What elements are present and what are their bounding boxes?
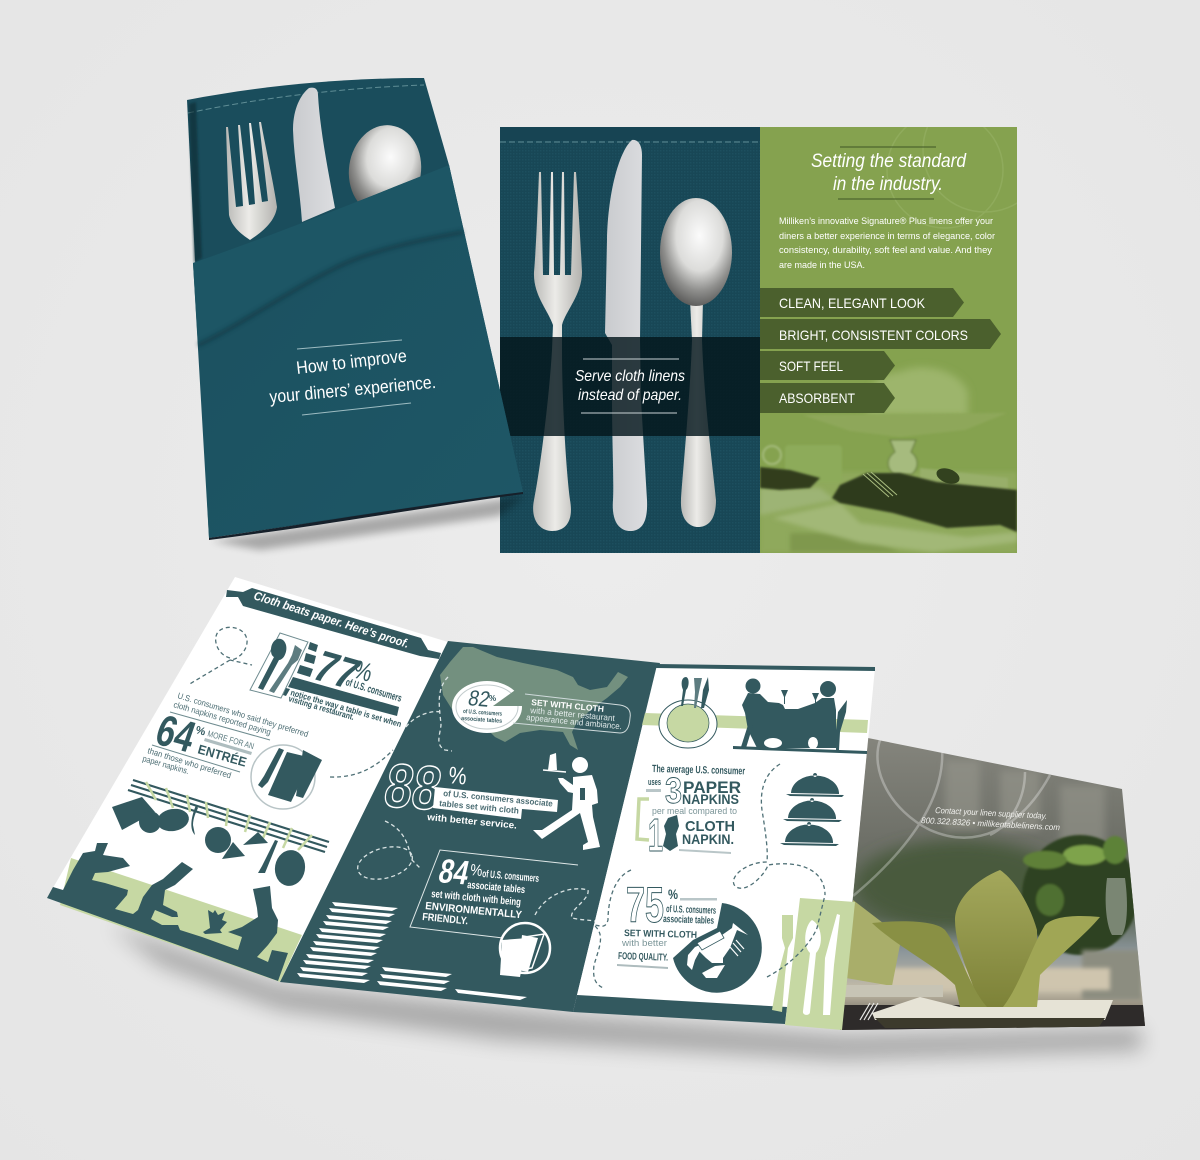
waiter head bbox=[572, 757, 588, 773]
triangle pan 2 bbox=[243, 832, 268, 845]
panel: serve cloth linens bbox=[500, 127, 760, 553]
green background bbox=[760, 127, 1017, 553]
more for an: MORE FOR AN bbox=[206, 728, 255, 751]
icon: cover knife bbox=[293, 88, 335, 222]
square pan bbox=[112, 797, 155, 830]
floor line bbox=[733, 746, 867, 754]
pill callout bbox=[513, 694, 630, 733]
cloche 2 bbox=[783, 798, 842, 822]
heading line 2: in the industry. bbox=[833, 174, 943, 195]
green fork bbox=[772, 915, 793, 1012]
88 outline figure: 88 bbox=[380, 752, 446, 824]
table and diners bbox=[742, 693, 836, 748]
open brochure shadow bbox=[110, 925, 1142, 1060]
rack rails bbox=[128, 780, 329, 852]
pale green floor strip bbox=[60, 858, 302, 982]
associate tables: associate tables bbox=[663, 914, 715, 927]
pocket flap bbox=[193, 165, 523, 538]
contact line 1: Contact your linen supplier today. bbox=[935, 805, 1047, 821]
right napkin petal bbox=[1003, 916, 1100, 1007]
pie caption bbox=[461, 709, 503, 725]
small tick bbox=[283, 688, 290, 696]
rack hooks bbox=[146, 782, 312, 850]
center napkin petal bbox=[955, 870, 1037, 1007]
dashed left path bbox=[594, 870, 631, 988]
waiter bottle bbox=[548, 753, 557, 770]
icon: large spoon bbox=[660, 198, 732, 527]
dashed over column bbox=[767, 895, 825, 977]
cover shadow bbox=[212, 496, 524, 550]
dashed path bbox=[733, 764, 825, 895]
dark tree band bbox=[855, 840, 1065, 930]
right glass bbox=[812, 693, 819, 706]
band rule bottom bbox=[581, 412, 677, 414]
body line 2: diners a better experience in terms of elegance, color bbox=[779, 231, 995, 242]
panel heading bbox=[811, 151, 967, 195]
body line 1: Milliken’s innovative Signature® Plus linens offer your bbox=[779, 216, 993, 227]
pale green strip bbox=[642, 713, 868, 733]
cover shadow side bbox=[189, 102, 202, 263]
cup bbox=[786, 446, 841, 470]
dashed map line bbox=[439, 677, 452, 751]
lobster lower claw bbox=[702, 965, 725, 978]
cupcakes bbox=[867, 367, 968, 416]
band rule top bbox=[583, 358, 679, 360]
cover heading bbox=[269, 346, 437, 407]
big 1: 1 bbox=[648, 809, 663, 861]
banner text bbox=[439, 788, 554, 816]
pale green column bbox=[785, 898, 855, 1030]
overlay ring 2 bbox=[853, 748, 942, 896]
faded photo bbox=[760, 127, 1017, 553]
waiter menu bbox=[580, 788, 585, 800]
cutlery on column bbox=[772, 914, 840, 1015]
big 77: 77 bbox=[306, 643, 368, 699]
dashed tail bbox=[385, 821, 420, 868]
cover back sheet bbox=[187, 78, 523, 538]
84 line 4: ENVIRONMENTALLY bbox=[425, 900, 522, 921]
plate stack center bbox=[377, 967, 452, 991]
panel: infographic left, white bbox=[47, 577, 448, 982]
ladle handle bbox=[191, 805, 198, 835]
top rule bbox=[656, 664, 875, 671]
rule bbox=[170, 712, 270, 740]
chefs silhouette bbox=[47, 843, 288, 981]
whisk bbox=[258, 840, 278, 873]
fork icon bbox=[269, 645, 302, 693]
84 stat bbox=[410, 850, 578, 977]
percent: % bbox=[668, 886, 678, 902]
napkin front sheet bbox=[500, 938, 528, 977]
icon: large fork bbox=[533, 172, 582, 531]
flower vase bbox=[1082, 950, 1142, 1000]
diner right head bbox=[820, 681, 836, 697]
pale table bbox=[880, 968, 1110, 990]
white page bbox=[577, 665, 875, 1010]
percent: % bbox=[470, 862, 483, 880]
overlay ring bbox=[877, 740, 1050, 838]
dark bar bbox=[288, 677, 399, 716]
cake stand stem bbox=[888, 440, 917, 474]
pie caption line 2: associate tables bbox=[461, 716, 503, 725]
pie caption line 1: of U.S. consumers bbox=[463, 709, 503, 718]
condensed text bbox=[422, 868, 540, 927]
dashed ring bbox=[354, 841, 416, 885]
knife icon bbox=[258, 748, 284, 788]
folded brochure cover bbox=[187, 78, 524, 550]
white knife bbox=[823, 914, 840, 1015]
arrow label: CLEAN, ELEGANT LOOK bbox=[779, 295, 926, 311]
foliage bbox=[1022, 835, 1138, 955]
outro copy bbox=[141, 745, 233, 780]
flap top band bbox=[193, 165, 463, 345]
cloches bbox=[780, 773, 844, 846]
percent: % bbox=[194, 724, 207, 738]
84 line 5: FRIENDLY. bbox=[422, 911, 469, 927]
intro line 2: cloth napkins reported paying bbox=[172, 699, 272, 737]
entree: ENTRÉE bbox=[196, 741, 249, 770]
plate rim bbox=[659, 700, 717, 748]
arrow: bright consistent colors bbox=[760, 319, 1001, 349]
heading line 1: How to improve bbox=[295, 346, 408, 378]
caption line 2: visiting a restaurant. bbox=[287, 693, 356, 722]
body copy bbox=[779, 216, 995, 271]
dashed paths bbox=[354, 677, 595, 921]
heading rule top bbox=[840, 146, 936, 148]
single plate bbox=[455, 989, 527, 1000]
heading line 2: your diners’ experience. bbox=[269, 372, 437, 407]
arrow label: BRIGHT, CONSISTENT COLORS bbox=[779, 327, 968, 343]
icon: large knife bbox=[605, 140, 647, 531]
with better: with better bbox=[621, 938, 667, 949]
heading line 1: Setting the standard bbox=[811, 151, 967, 172]
chefs and counter bbox=[47, 843, 288, 981]
uses: uses bbox=[648, 777, 661, 787]
top shade bbox=[500, 127, 760, 141]
per meal: per meal compared to bbox=[652, 806, 737, 816]
napkins: NAPKINS bbox=[682, 792, 739, 807]
band line 1: Serve cloth linens bbox=[575, 368, 685, 385]
dashed loop bbox=[406, 712, 441, 727]
napkin icon bbox=[268, 752, 312, 802]
food quality: FOOD QUALITY. bbox=[618, 951, 668, 964]
couple dining silhouette bbox=[733, 678, 867, 754]
left chair leg bbox=[741, 725, 753, 748]
box frame bbox=[410, 850, 578, 938]
pie disc bbox=[452, 681, 522, 733]
spoon handle bbox=[681, 300, 716, 527]
body line 3: consistency, durability, soft feel and value. And they bbox=[779, 245, 992, 256]
plate underside bbox=[875, 1018, 1105, 1028]
spoon bowl bbox=[660, 198, 732, 306]
arrow shape bbox=[760, 319, 1001, 349]
64 stat bbox=[141, 690, 322, 809]
diner left head bbox=[746, 678, 760, 694]
arrow: clean elegant look bbox=[760, 288, 964, 317]
84 line 1: of U.S. consumers bbox=[482, 868, 540, 885]
77 stat bbox=[250, 633, 403, 729]
arrow shape bbox=[760, 351, 895, 380]
left glass bbox=[781, 690, 788, 704]
white gap ovals bbox=[764, 737, 818, 749]
contact line 2: 800.322.8326 • millikentablelinens.com bbox=[921, 815, 1060, 832]
arrow label: ABSORBENT bbox=[779, 390, 855, 406]
lobster disc bbox=[673, 903, 762, 993]
pie wedge bbox=[493, 688, 526, 706]
triangle pan bbox=[222, 842, 245, 859]
body line 4: are made in the USA. bbox=[779, 260, 865, 271]
cover rule bottom bbox=[302, 403, 411, 415]
foliage mid leaves bbox=[1023, 851, 1067, 869]
intro copy bbox=[172, 690, 310, 739]
arrow shape bbox=[760, 383, 895, 413]
75 outline figure: 75 bbox=[626, 877, 664, 933]
of us consumers: of U.S. consumers bbox=[344, 676, 403, 705]
lobster body bbox=[695, 923, 748, 963]
intro line 1: U.S. consumers who said they preferred bbox=[176, 690, 310, 739]
panel: back cover photo bbox=[835, 735, 1150, 1035]
stitched hem bbox=[188, 85, 424, 113]
small blocks bbox=[297, 642, 318, 677]
cake stand plate bbox=[811, 414, 1000, 436]
left napkin bbox=[846, 900, 900, 986]
cloche 1 bbox=[786, 773, 844, 797]
round pan bbox=[155, 806, 191, 834]
percent: % bbox=[489, 694, 496, 703]
napkin icon back bbox=[296, 750, 322, 798]
of us consumers: of U.S. consumers bbox=[666, 904, 716, 917]
big 64: 64 bbox=[150, 706, 202, 762]
rule bbox=[617, 964, 668, 969]
napkin back sheets bbox=[518, 935, 538, 972]
usa map bbox=[440, 647, 628, 750]
wall circles bbox=[886, 127, 1017, 228]
green bracket bbox=[637, 799, 649, 840]
plate icon bbox=[659, 677, 717, 748]
white banner bbox=[433, 787, 558, 819]
paper: PAPER bbox=[683, 778, 741, 797]
lobster tail bbox=[697, 931, 724, 950]
lobster whiskers bbox=[730, 940, 744, 956]
dashed squiggle bbox=[535, 889, 595, 921]
spoon bbox=[681, 677, 689, 706]
arrow: soft feel bbox=[760, 351, 895, 380]
left napkin petal bbox=[872, 921, 987, 1007]
pill line 2: appearance and ambiance. bbox=[526, 712, 622, 731]
outro line 2: paper napkins. bbox=[141, 753, 190, 776]
napkin ring icon bbox=[500, 923, 550, 973]
outro line 1: than those who preferred bbox=[146, 745, 233, 780]
fabric background bbox=[500, 127, 760, 553]
plate center bbox=[667, 704, 709, 742]
panel: infographic middle, teal bbox=[280, 641, 660, 1012]
wine glass bbox=[1106, 878, 1127, 935]
overlay circle lines bbox=[853, 740, 1050, 896]
cutlery frame bbox=[250, 633, 308, 698]
3 paper napkins stat bbox=[637, 763, 745, 861]
pan flames bbox=[203, 910, 227, 934]
pie callout 82 bbox=[452, 681, 526, 733]
band line 2: instead of paper. bbox=[578, 387, 682, 404]
dark napkin bbox=[832, 473, 1017, 532]
contact text bbox=[921, 805, 1060, 832]
stitched hem line bbox=[500, 141, 760, 143]
title tab bbox=[226, 588, 441, 659]
tab shape bbox=[226, 588, 441, 659]
82 figure: 82 bbox=[466, 685, 492, 712]
flap fold shadow bbox=[198, 232, 463, 345]
hanging pots bbox=[112, 797, 308, 888]
short rule bbox=[646, 789, 661, 792]
waiter tray bbox=[543, 770, 566, 772]
spoon on napkin bbox=[936, 468, 960, 484]
dashed tail bbox=[188, 660, 230, 685]
table surface bbox=[760, 472, 1017, 553]
teal page bbox=[280, 641, 660, 1012]
arrow label: SOFT FEEL bbox=[779, 358, 843, 374]
chair bbox=[836, 700, 847, 750]
dashed flight path bbox=[188, 627, 393, 777]
fork tines bbox=[860, 1003, 878, 1020]
fork bbox=[694, 678, 702, 708]
dashed circle bbox=[216, 627, 252, 665]
small pot bbox=[139, 811, 161, 833]
white square plate bbox=[872, 997, 1113, 1020]
84 figure: 84 bbox=[435, 853, 473, 892]
fork tines on napkin bbox=[863, 472, 897, 497]
foliage bright leaves bbox=[1063, 845, 1107, 865]
big 3: 3 bbox=[665, 770, 682, 811]
dark band bbox=[500, 337, 760, 436]
plate left bbox=[760, 488, 835, 515]
photo background bbox=[835, 735, 1150, 1035]
icon: cover spoon bbox=[343, 120, 427, 220]
cloth: CLOTH bbox=[685, 818, 735, 835]
percent: % bbox=[447, 762, 468, 791]
pot rack bbox=[112, 780, 329, 888]
tab title: Cloth beats paper. Here’s proof. bbox=[252, 589, 411, 651]
banner line 1: of U.S. consumers associate bbox=[443, 788, 554, 809]
waiter silhouette bbox=[533, 753, 600, 850]
rule bbox=[680, 898, 717, 900]
intro: The average U.S. consumer bbox=[652, 763, 745, 777]
lobster left claw bbox=[687, 947, 701, 970]
pie ring bbox=[456, 685, 518, 729]
table shadow bbox=[790, 533, 900, 552]
foliage dark mass bbox=[1022, 835, 1138, 955]
white page bbox=[47, 577, 448, 982]
pill heading: SET WITH CLOTH bbox=[531, 697, 604, 714]
overlay ring 3 bbox=[990, 772, 1025, 835]
far right plate bbox=[920, 468, 1008, 488]
napkin sheet divider bbox=[520, 934, 544, 970]
foliage lower leaves bbox=[1036, 884, 1064, 916]
window highlights bbox=[945, 760, 1105, 845]
with better service: with better service. bbox=[426, 812, 517, 832]
cover spine bbox=[209, 492, 523, 540]
cover rule top bbox=[297, 340, 402, 349]
arrow shape bbox=[760, 288, 964, 317]
cup handle bbox=[763, 446, 781, 464]
table dark bbox=[840, 1005, 1145, 1030]
pill line 1: with a better restaurant bbox=[529, 705, 616, 723]
panel: infographic right, white bbox=[573, 664, 875, 1030]
lobster bbox=[687, 923, 748, 978]
napkin: NAPKIN. bbox=[682, 832, 734, 847]
arrow: absorbent bbox=[760, 383, 895, 413]
icon: cover fork bbox=[226, 122, 277, 240]
waiter body bbox=[533, 775, 600, 850]
pill outline bbox=[513, 694, 630, 733]
band heading bbox=[575, 368, 685, 404]
percent: % bbox=[350, 654, 376, 688]
75 stat bbox=[617, 877, 762, 993]
set with cloth: SET WITH CLOTH bbox=[624, 928, 697, 941]
rule under more bbox=[204, 738, 252, 755]
plate under napkin bbox=[773, 503, 1017, 552]
left plate bbox=[843, 985, 943, 997]
dashed right path bbox=[330, 750, 393, 777]
teal lower band bbox=[573, 995, 787, 1024]
rule under stat bbox=[152, 745, 240, 772]
plate stack left bbox=[297, 902, 398, 983]
knife bbox=[701, 677, 709, 708]
napkin icon bbox=[663, 815, 679, 851]
caption bbox=[287, 687, 403, 729]
cloche 3 bbox=[780, 822, 839, 846]
panel: setting the standard bbox=[760, 127, 1017, 553]
round pan large bbox=[272, 848, 308, 888]
caption line 1: notice the way a table is set when bbox=[289, 687, 403, 729]
84 line 2: associate tables bbox=[467, 879, 526, 896]
spoon icon bbox=[258, 639, 286, 690]
plate ring bbox=[251, 745, 315, 809]
white spoon bbox=[803, 920, 821, 1015]
banner line 2: tables set with cloth bbox=[439, 798, 519, 816]
rule bbox=[679, 849, 731, 854]
round pot bbox=[205, 827, 231, 853]
left dark napkin bbox=[760, 467, 820, 490]
foliage side bbox=[1103, 836, 1127, 864]
84 line 3: set with cloth with being bbox=[431, 888, 521, 909]
88 stat bbox=[380, 752, 558, 832]
heading rule bottom bbox=[838, 198, 934, 200]
